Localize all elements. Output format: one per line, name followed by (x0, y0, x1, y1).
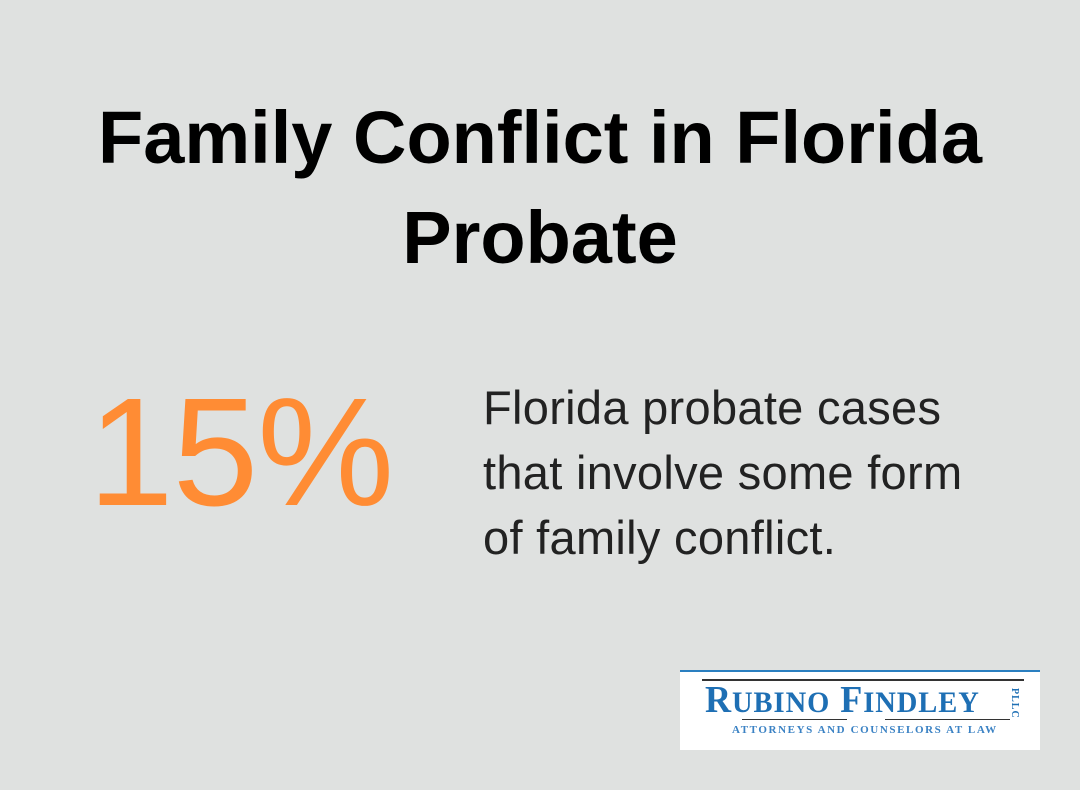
logo: Rubino Findley: RUBINO FINDLEY (705, 679, 980, 721)
description text (483, 381, 962, 564)
title: Probate (402, 196, 678, 279)
stat: 15%: 15% (88, 366, 393, 538)
logo: Rubino Findley: PLLC (1009, 688, 1020, 719)
logo: Rubino Findley: ATTORNEYS AND COUNSELORS AT LAW (732, 724, 998, 736)
description text: of family conflict. (483, 511, 836, 564)
description text: Florida probate cases (483, 381, 941, 434)
description text: that involve some form (483, 446, 962, 499)
title (98, 96, 982, 279)
logo: Rubino Findley (680, 670, 1040, 750)
title: Family Conflict in Florida (98, 96, 982, 179)
